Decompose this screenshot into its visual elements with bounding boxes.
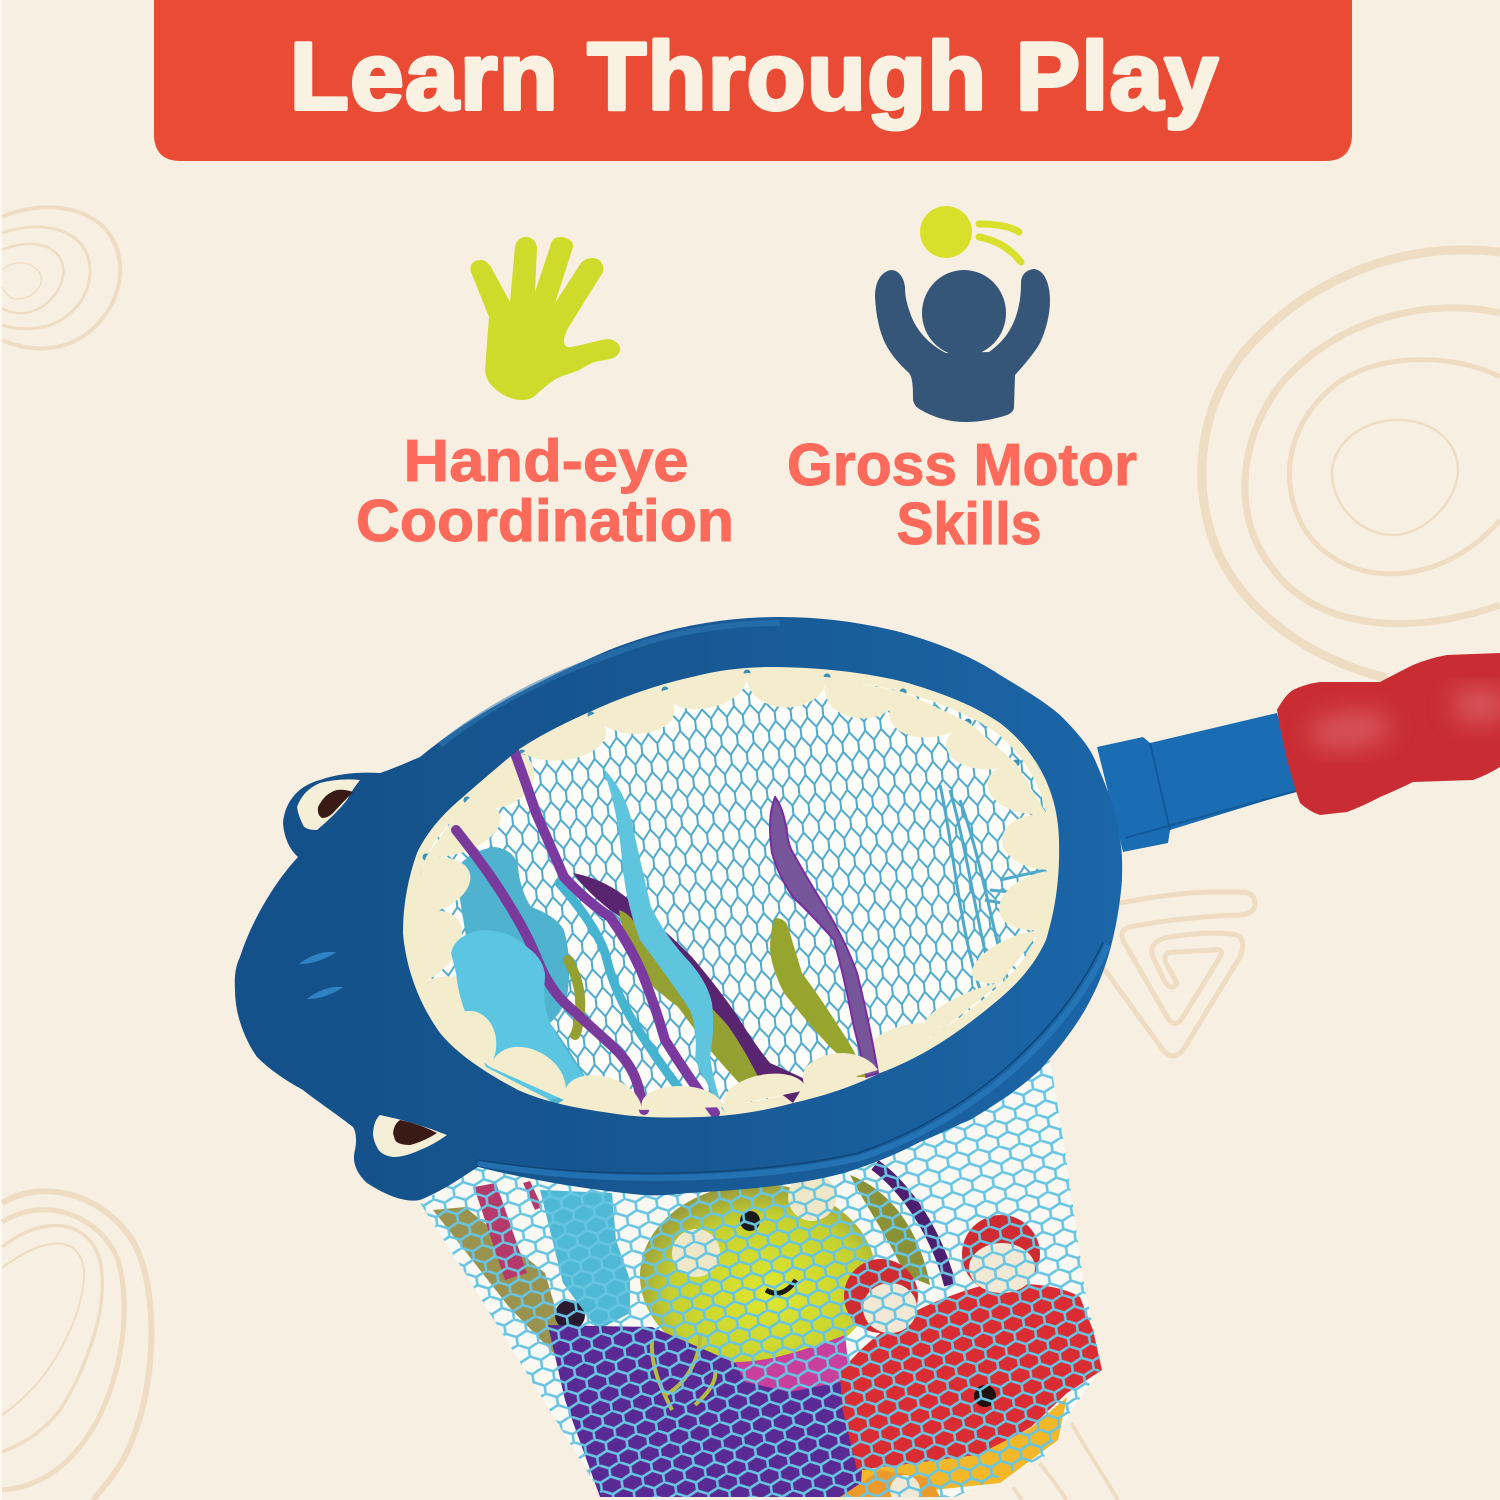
blue shaft [1097, 713, 1300, 852]
eye: lower [373, 1115, 447, 1157]
olive strip centre [619, 910, 761, 1087]
purple toy [548, 1325, 875, 1497]
purple strip left [456, 830, 644, 1110]
dark purple strip [573, 873, 807, 1103]
background swirl: left top [2, 207, 120, 348]
thin blue strip [559, 883, 678, 1087]
olive strip left [568, 960, 580, 1035]
label: gross motor skills: Skills [896, 491, 1042, 557]
shark rim [235, 617, 1122, 1201]
fish toy front [451, 930, 590, 1100]
gills [302, 953, 340, 998]
orange cream toy [840, 1470, 940, 1497]
olive and pink strips on left [433, 1181, 585, 1354]
eye: upper [297, 779, 360, 830]
front teeth [408, 857, 878, 1110]
background swirl: triangle [1105, 892, 1255, 1056]
label: hand-eye coordination [356, 428, 734, 554]
right olive strip [770, 918, 866, 1077]
background swirl: right [1202, 250, 1500, 678]
label: hand-eye coordination: Hand-eye [404, 428, 688, 494]
dark reed toys [850, 1165, 950, 1285]
back teeth [408, 673, 1058, 1070]
rim highlights and seam [478, 945, 1108, 1178]
icon: hand [470, 237, 620, 400]
left edge strip [0, 0, 2, 1500]
tall purple strip [513, 748, 715, 1113]
tall light blue strip [603, 768, 725, 1113]
yellow orange toy [860, 1397, 1067, 1497]
seaweed and fish toys inside net [451, 748, 878, 1113]
mouth interior with mesh [400, 660, 1065, 1125]
red grip [1277, 653, 1500, 815]
net bag with bath toys [420, 1060, 1102, 1500]
grip highlights [1306, 685, 1500, 756]
label: gross motor skills: Gross Motor [787, 432, 1137, 498]
background swirl: lower right [1013, 1423, 1118, 1500]
handle [1097, 653, 1500, 852]
label: hand-eye coordination: Coordination [356, 488, 734, 554]
red crab toy [840, 1215, 1102, 1470]
green toy [640, 1173, 876, 1368]
magenta band [735, 1335, 850, 1392]
title text: Learn Through Play [290, 23, 1218, 130]
fish toy back [455, 847, 590, 1105]
icon: person catching ball [875, 206, 1050, 422]
title banner [154, 0, 1352, 161]
shark net toy [235, 617, 1500, 1500]
net mesh overlay [420, 1060, 1102, 1497]
right purple strip [770, 797, 878, 1077]
teal fish toy [540, 1190, 630, 1330]
background swirl: lower left [2, 1191, 151, 1500]
label: gross motor skills [787, 432, 1137, 557]
